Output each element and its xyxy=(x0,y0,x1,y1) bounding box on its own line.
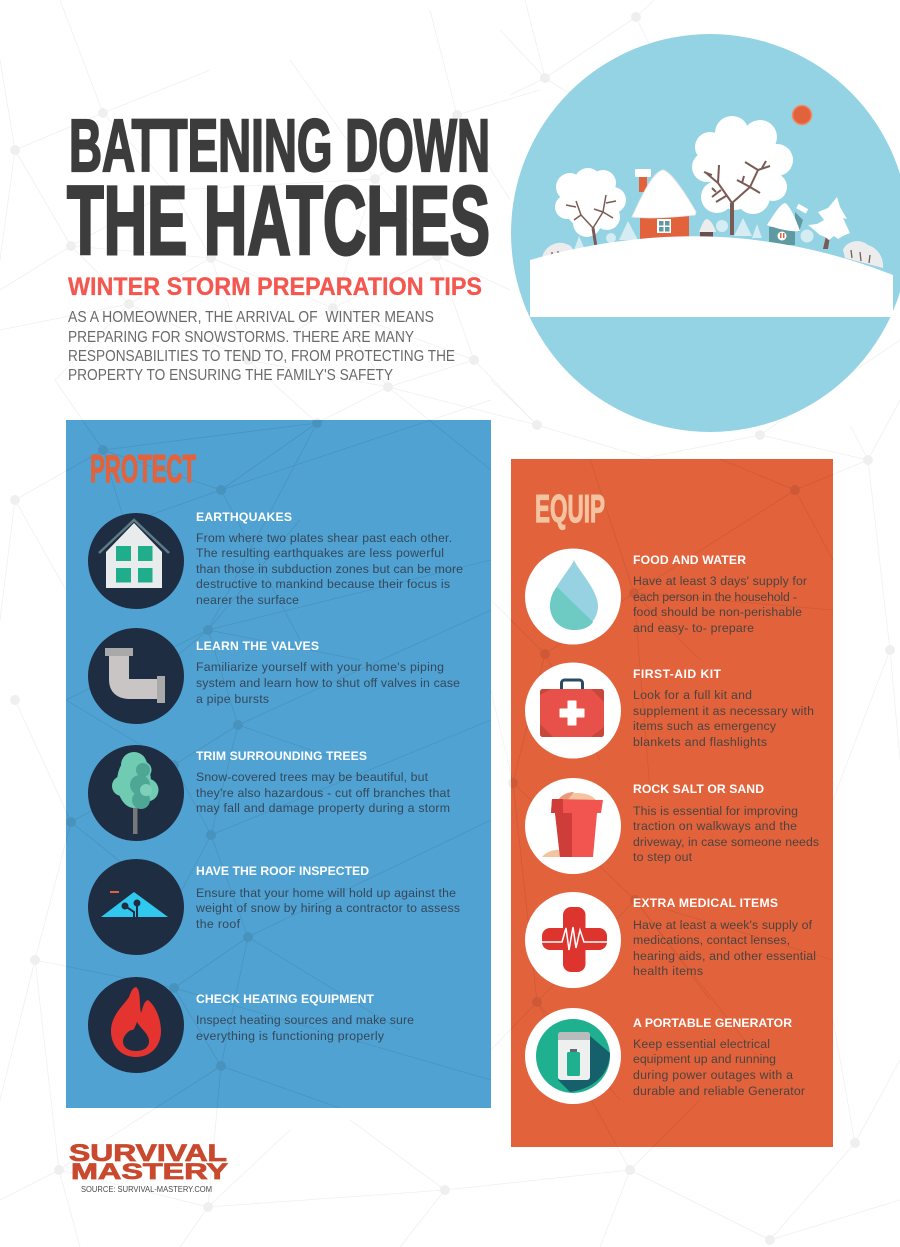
red house xyxy=(632,169,696,242)
item: learn the valves xyxy=(196,639,460,706)
item: rock salt or sand: to step out xyxy=(633,850,693,864)
sun xyxy=(792,106,812,124)
item: have the roof inspected: HAVE THE ROOF INSPECTED xyxy=(196,864,369,878)
logo: survival mastery xyxy=(69,1140,228,1184)
item: extra medical items: hearing aids, and other essential xyxy=(633,949,816,963)
item: rock salt or sand: This is essential for improving xyxy=(633,804,798,818)
item: earthquakes: From where two plates shear past each other. xyxy=(196,531,452,545)
icon: medical cross xyxy=(525,892,621,988)
item: have the roof inspected xyxy=(195,864,460,931)
item: first-aid kit xyxy=(633,667,814,749)
item: learn the valves: system and learn how to shut off valves in case xyxy=(196,676,460,690)
item: first-aid kit: blankets and flashlights xyxy=(633,735,767,749)
large snowy tree xyxy=(692,116,793,235)
item: food and water: each person in the household - xyxy=(633,590,797,604)
item: first-aid kit: supplement it as necessary with xyxy=(633,704,814,718)
icon: pipe xyxy=(88,628,184,724)
item: check heating equipment: everything is functioning properly xyxy=(196,1029,385,1043)
item: have the roof inspected: Ensure that your home will hold up against the xyxy=(196,886,456,900)
item: first-aid kit: items such as emergency xyxy=(633,719,777,733)
item: check heating equipment: Inspect heating sources and make sure xyxy=(196,1013,414,1027)
item: a portable generator: durable and reliable Generator xyxy=(633,1084,805,1098)
intro text: PREPARING FOR SNOWSTORMS. THERE ARE MANY xyxy=(68,329,414,346)
item: learn the valves: a pipe bursts xyxy=(196,692,269,706)
item: have the roof inspected: the roof xyxy=(196,917,241,931)
item: food and water: Have at least 3 days' supply for xyxy=(633,574,807,588)
item: trim surrounding trees: TRIM SURROUNDING TREES xyxy=(196,749,367,763)
item: food and water xyxy=(633,553,807,635)
icon: flame xyxy=(88,977,184,1073)
logo: survival mastery: SURVIVAL xyxy=(69,1140,227,1167)
item: a portable generator: Keep essential electrical xyxy=(633,1037,770,1051)
item: a portable generator: during power outages with a xyxy=(633,1068,793,1082)
item: learn the valves: Familiarize yourself with your home's piping xyxy=(196,660,444,674)
hero illustration: snowy village in circle xyxy=(511,34,900,432)
item: rock salt or sand: ROCK SALT OR SAND xyxy=(633,782,764,796)
heading: protect: PROTECT xyxy=(90,448,196,491)
item: food and water: FOOD AND WATER xyxy=(633,553,746,567)
item: extra medical items: Have at least a week's supply of xyxy=(633,918,813,932)
item: trim surrounding trees: they're also hazardous - cut off branches that xyxy=(196,786,451,800)
item: food and water: food should be non-perishable xyxy=(633,605,802,619)
item: earthquakes: than those in subduction zones but can be more xyxy=(196,562,463,576)
icon: roof xyxy=(88,859,184,955)
icon: tree xyxy=(88,745,184,841)
icon: generator xyxy=(525,1008,621,1104)
item: extra medical items: EXTRA MEDICAL ITEMS xyxy=(633,896,778,910)
item: rock salt or sand xyxy=(633,782,819,864)
item: trim surrounding trees xyxy=(196,749,451,815)
item: check heating equipment xyxy=(196,992,414,1043)
item: trim surrounding trees: may fall and damage property during a storm xyxy=(196,801,450,815)
small houses and pale trees xyxy=(574,203,814,250)
item: earthquakes: destructive to mankind because their focus is xyxy=(196,577,450,591)
intro text: PROPERTY TO ENSURING THE FAMILY'S SAFETY xyxy=(68,367,393,384)
item: a portable generator xyxy=(633,1016,805,1098)
snowy bushes xyxy=(542,241,883,268)
logo: survival mastery: MASTERY xyxy=(71,1159,228,1184)
intro text: AS A HOMEOWNER, THE ARRIVAL OF WINTER MEANS xyxy=(68,309,434,326)
item: food and water: and easy- to- prepare xyxy=(633,621,754,635)
item: have the roof inspected: weight of snow by hiring a contractor to assess xyxy=(195,901,460,915)
icon: water drop xyxy=(525,548,621,644)
item: check heating equipment: CHECK HEATING EQUIPMENT xyxy=(196,992,375,1006)
item: extra medical items: health items xyxy=(633,964,703,978)
icon: first-aid kit xyxy=(525,662,621,758)
heading: equip: EQUIP xyxy=(535,488,605,531)
item: first-aid kit: FIRST-AID KIT xyxy=(633,667,722,681)
small snowy tree xyxy=(555,168,626,247)
item: extra medical items xyxy=(633,896,816,978)
title xyxy=(67,104,490,275)
icon: salt bucket xyxy=(525,778,621,874)
subtitle: WINTER STORM PREPARATION TIPS xyxy=(68,273,482,301)
item: a portable generator: A PORTABLE GENERATOR xyxy=(633,1016,792,1030)
item: earthquakes: EARTHQUAKES xyxy=(196,510,292,524)
icon: house xyxy=(88,513,184,609)
intro text xyxy=(68,309,455,384)
item: rock salt or sand: traction on walkways and the xyxy=(633,819,797,833)
item: learn the valves: LEARN THE VALVES xyxy=(196,639,319,653)
snowy pine tree xyxy=(808,197,850,249)
item: extra medical items: medications, contact lenses, xyxy=(633,933,790,947)
item: earthquakes: nearer the surface xyxy=(196,593,299,607)
snowy ground xyxy=(530,236,893,317)
item: rock salt or sand: driveway, in case someone needs xyxy=(633,835,819,849)
source line: SOURCE: SURVIVAL-MASTERY.COM xyxy=(81,1185,212,1194)
item: trim surrounding trees: Snow-covered trees may be beautiful, but xyxy=(196,770,429,784)
item: earthquakes: The resulting earthquakes are less powerful xyxy=(196,546,444,560)
intro text: RESPONSABILITIES TO TEND TO, FROM PROTECTING THE xyxy=(68,348,455,365)
title: THE HATCHES xyxy=(67,166,490,275)
item: first-aid kit: Look for a full kit and xyxy=(633,688,752,702)
item: a portable generator: equipment up and running xyxy=(633,1052,776,1066)
title: BATTENING DOWN xyxy=(69,104,490,187)
item: earthquakes xyxy=(196,510,463,607)
